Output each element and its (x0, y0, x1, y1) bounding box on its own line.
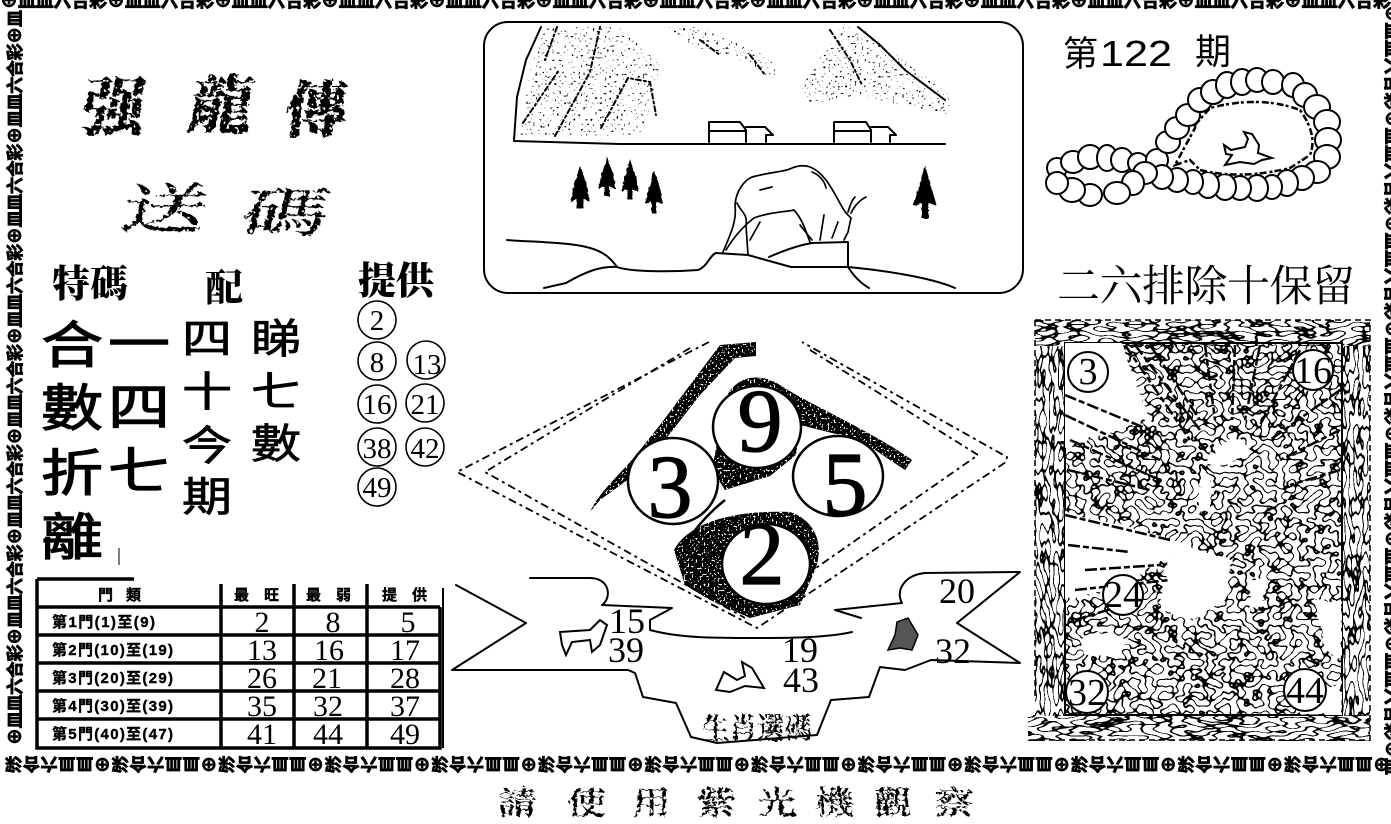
table: door categories: 17 (390, 634, 420, 667)
subtitle: send numbers: 碼 (235, 184, 336, 244)
title: calligraphic heading (76, 71, 351, 146)
panel: engraved stamp portrait (1028, 320, 1370, 741)
table: door categories: 第2門(10)至(19) (52, 641, 173, 659)
circled provided numbers: 38 (362, 433, 392, 465)
big text block: four columns of clues: 七 (251, 369, 301, 415)
big text block: four columns of clues: 四 (182, 316, 232, 362)
circled provided numbers: 21 (410, 389, 440, 421)
table: door categories (37, 579, 443, 751)
houses (709, 122, 896, 142)
circled provided numbers (358, 301, 445, 506)
icon: goat (560, 620, 607, 655)
panel: engraved stamp portrait: 3 (1078, 351, 1098, 393)
heading: match: 配 (205, 268, 243, 310)
heading: issue number: 122 (1100, 33, 1172, 74)
numbered circles (1066, 350, 1333, 713)
trees (571, 158, 936, 218)
border: bottom mirrored strip: 彩合六皿皿⊕彩合六皿皿⊕彩合六皿皿⊕彩合六皿皿⊕彩合六皿皿⊕彩合六皿皿⊕彩合六皿皿⊕彩合六皿皿⊕彩合六皿皿⊕彩合六皿皿⊕彩合六皿皿⊕彩合六皿皿⊕彩合六皿皿⊕ (5, 754, 1390, 774)
table: door categories: 供 (412, 587, 427, 604)
table: door categories: 16 (314, 634, 344, 667)
circled provided numbers: 42 (410, 433, 440, 465)
table: door categories: 弱 (336, 587, 351, 604)
panel: four-circle diamond: 5 (822, 435, 868, 534)
big text block: four columns of clues (41, 316, 301, 567)
circled provided numbers: 8 (370, 347, 384, 379)
table: door categories: 門 (98, 587, 113, 604)
dashed diamond (457, 342, 1007, 628)
table: door categories: 49 (390, 718, 420, 751)
number circles (628, 386, 883, 604)
banner numbers: 19 (782, 630, 818, 670)
title: calligraphic heading: 龍 (184, 71, 260, 142)
banner numbers: 43 (783, 660, 819, 700)
big text block: four columns of clues: 七 (108, 444, 170, 501)
footer: use the purple light viewer: 請使用紫光機觀察 (498, 785, 974, 821)
heading: issue number (1063, 31, 1231, 74)
border: left strip: ⊕皿皿六合彩⊕皿皿六合彩⊕皿皿六合彩⊕皿皿六合彩⊕皿皿六合彩⊕皿皿六合彩⊕皿皿六合彩⊕皿 (5, 10, 25, 745)
table: door categories: 2 (254, 606, 270, 639)
banner label: 生肖選碼 (702, 713, 812, 746)
panel: engraved stamp portrait: 24 (1104, 574, 1142, 616)
ornamental frame (1028, 320, 1370, 741)
illustration: bead ring with rabbit (1046, 68, 1341, 206)
ground (507, 240, 955, 288)
big text block: four columns of clues: 十 (182, 369, 232, 415)
big text block: four columns of clues: 睇 (251, 316, 301, 362)
table: door categories: 26 (247, 662, 277, 695)
panel: ribbon banner with zodiac numbers (452, 571, 1020, 746)
big text block: four columns of clues: 離 (41, 510, 103, 567)
table: door categories: 44 (313, 718, 343, 751)
heading: provided: 提供 (358, 261, 437, 303)
table: door categories: 37 (390, 690, 420, 723)
table: door categories: 28 (390, 662, 420, 695)
table: door categories: 最 (234, 587, 249, 604)
heading: issue number: 期 (1195, 31, 1231, 72)
title: calligraphic heading: 强 (76, 73, 158, 144)
banner numbers: 15 (609, 601, 645, 641)
table: door categories: 41 (247, 718, 277, 751)
heading: issue number: 第 (1063, 35, 1098, 74)
big text block: four columns of clues: 今 (182, 423, 232, 469)
heading: keep-and-exclude clue: 二六排除十保留 (1057, 264, 1355, 311)
portrait texture (1060, 340, 1342, 715)
icon: tiger (888, 618, 918, 650)
table: door categories: 類 (126, 587, 141, 604)
title: calligraphic heading: 傳 (282, 78, 351, 146)
table: door categories: 21 (312, 662, 342, 695)
big text block: four columns of clues: 數 (251, 421, 301, 467)
panel: four-circle diamond: 9 (738, 372, 782, 471)
table: door categories: 第4門(30)至(39) (52, 697, 173, 715)
table: door categories: 5 (400, 606, 416, 639)
banner numbers: 39 (608, 630, 644, 670)
big text block: four columns of clues: 一 (108, 317, 170, 374)
panel: engraved stamp portrait: 32 (1068, 672, 1106, 714)
table: door categories: 第1門(1)至(9) (52, 613, 155, 631)
circled provided numbers: 16 (362, 389, 392, 421)
table: door categories: 最 (306, 587, 321, 604)
banner numbers: 32 (935, 631, 971, 671)
panel: four-circle diamond: 3 (648, 438, 692, 537)
circled provided numbers: 49 (362, 472, 392, 504)
big text block: four columns of clues: 合 (41, 318, 103, 375)
table: door categories: 旺 (264, 587, 279, 604)
table: door categories: 35 (247, 690, 277, 723)
icon: rabbit (716, 662, 764, 692)
big text block: four columns of clues: 期 (182, 474, 232, 520)
panel: four-circle diamond: 2 (740, 505, 784, 604)
table: door categories: 32 (313, 690, 343, 723)
heading: special number: 特碼 (52, 264, 128, 306)
stippled blobs (585, 340, 915, 620)
subtitle: send numbers (115, 180, 336, 244)
banner numbers (608, 571, 975, 700)
table: door categories: 第3門(20)至(29) (52, 669, 173, 687)
panel: engraved stamp portrait: 16 (1294, 350, 1332, 392)
icon: rabbit (1224, 132, 1272, 165)
big text block: four columns of clues: 四 (108, 380, 170, 437)
panel: four-circle diamond (457, 340, 1007, 628)
table: door categories: 第5門(40)至(47) (52, 725, 173, 743)
circled provided numbers: 13 (412, 349, 442, 381)
circled provided numbers: 2 (370, 305, 384, 337)
banner numbers: 20 (939, 571, 975, 611)
panel: landscape with grazing goat (484, 22, 1023, 293)
subtitle: send numbers: 送 (115, 180, 216, 240)
goat (723, 166, 866, 255)
table: door categories: 提 (382, 587, 397, 604)
panel: engraved stamp portrait: 44 (1286, 670, 1324, 712)
big text block: four columns of clues: 數 (41, 381, 103, 438)
big text block: four columns of clues: 折 (41, 446, 103, 503)
mountains (510, 25, 955, 144)
table: door categories: 13 (247, 634, 277, 667)
table: door categories: 8 (326, 606, 340, 639)
